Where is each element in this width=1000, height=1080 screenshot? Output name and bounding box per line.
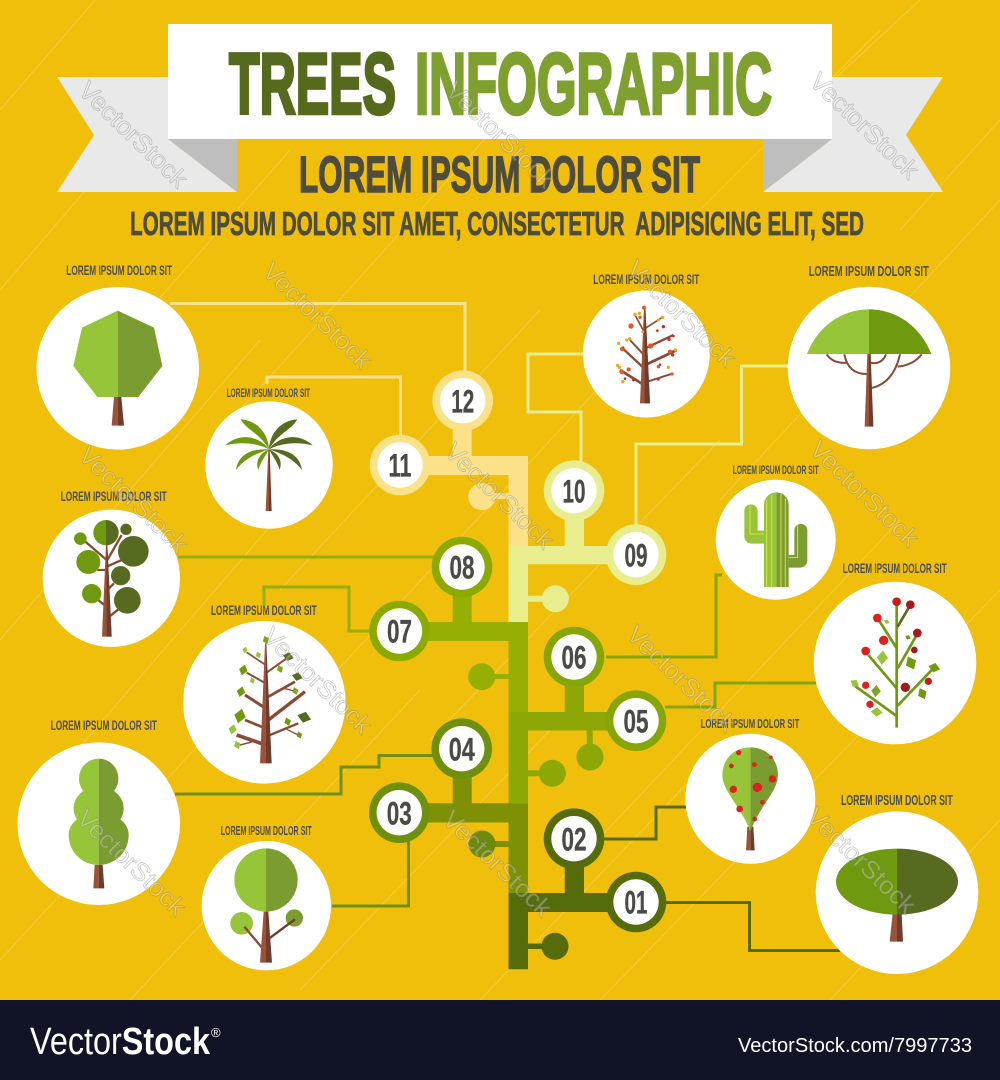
label: palm: LOREM IPSUM DOLOR SIT (227, 388, 310, 400)
trunk section: 03-04 (400, 749, 528, 893)
panel: berry tree (814, 582, 976, 744)
watermarks: VectorStock (621, 620, 741, 738)
title banner (57, 24, 943, 192)
panel: leafy tree (183, 621, 346, 784)
watermarks: VectorStock (804, 435, 924, 553)
label: autumn tree: LOREM IPSUM DOLOR SIT (593, 271, 700, 287)
node 08 (432, 537, 492, 597)
node 11: 11 (388, 448, 412, 484)
trunk section: 09-10 (508, 490, 636, 622)
trunk section: 11-12 (400, 400, 528, 546)
title second word: INFOGRAPHIC (415, 36, 772, 132)
watermarks: VectorStock (439, 437, 559, 555)
ribbon tail: left (57, 77, 237, 192)
node 03 (369, 782, 430, 843)
node 08: 08 (450, 550, 474, 586)
node 01: 01 (624, 885, 648, 921)
watermarks: VectorStock (73, 76, 193, 194)
icon: palm tree (225, 419, 313, 511)
node 06 (544, 627, 604, 687)
node 10 (544, 460, 604, 521)
label: tree 12: LOREM IPSUM DOLOR SIT (66, 262, 172, 278)
node 05 (606, 690, 666, 751)
connector lines (170, 304, 840, 950)
icon: tall tree (69, 759, 129, 888)
icon: pear tree (722, 747, 778, 850)
panel: oval tree (816, 811, 978, 974)
panel: umbrella tree (788, 287, 950, 449)
node 09: 09 (624, 537, 648, 573)
watermarks: VectorStock (440, 76, 560, 194)
watermarks: VectorStock (437, 805, 557, 923)
subtitle: LOREM IPSUM DOLOR SIT (299, 146, 700, 203)
panel: circles tree (43, 510, 180, 647)
watermarks: VectorStock (71, 804, 191, 922)
node 01 (606, 872, 666, 932)
icon: heptagon tree (73, 311, 162, 426)
footer bar: ® (211, 1025, 221, 1040)
icon: autumn tree (616, 306, 677, 403)
node 02 (544, 808, 604, 869)
watermarks: VectorStock (804, 67, 924, 185)
panel: cactus (716, 480, 836, 600)
icon: oval tree (836, 849, 958, 942)
panel: tall tree (17, 742, 180, 905)
watermarks: VectorStock (73, 441, 193, 559)
label: cactus: LOREM IPSUM DOLOR SIT (733, 463, 819, 477)
icon: round tree (230, 848, 303, 963)
node 11 (370, 435, 430, 495)
node 03: 03 (387, 795, 412, 831)
node 04 (431, 718, 492, 779)
panel: heptagon tree (36, 287, 199, 450)
icon: berry tree (850, 597, 941, 728)
icon: circles tree (74, 520, 149, 637)
trunk section: 07-08 (400, 567, 528, 712)
title: TREES (229, 36, 396, 132)
node 04: 04 (449, 731, 475, 767)
trunk section: 01-02 (508, 839, 636, 969)
panel: pear tree (685, 734, 815, 864)
watermarks: VectorStock (257, 622, 377, 740)
label: leafy tree: LOREM IPSUM DOLOR SIT (211, 602, 317, 618)
label: circles tree: LOREM IPSUM DOLOR SIT (61, 488, 167, 504)
node 09 (606, 524, 666, 585)
watermarks: VectorStock (257, 257, 377, 375)
icon: umbrella tree (807, 309, 931, 427)
panel: autumn tree (583, 290, 710, 418)
node 10: 10 (562, 473, 586, 509)
panel: palm tree (205, 401, 333, 529)
watermarks: VectorStock (621, 255, 741, 373)
node 05: 05 (624, 703, 648, 739)
node 07: 07 (387, 614, 412, 650)
watermarks: VectorStock (801, 802, 921, 920)
footer bar (0, 1000, 1000, 1080)
label: pear tree: LOREM IPSUM DOLOR SIT (701, 716, 799, 731)
panel: round tree (202, 841, 331, 970)
footer logo: VectorStock (30, 1021, 211, 1063)
node 06: 06 (562, 640, 586, 676)
node 02: 02 (562, 821, 586, 857)
trunk section: 05-06 (508, 657, 636, 803)
ribbon tail: right (763, 77, 943, 192)
node 12 (432, 370, 493, 431)
node 07 (369, 601, 430, 661)
node 12: 12 (451, 383, 474, 419)
icon: cactus (744, 492, 807, 587)
central tree diagram (400, 400, 636, 969)
footer image id: VectorStock.com/7997733 (738, 1035, 972, 1057)
label: round tree: LOREM IPSUM DOLOR SIT (221, 824, 312, 838)
icon: leafy tree (228, 635, 311, 763)
watermarks (71, 67, 924, 923)
label: tall tree: LOREM IPSUM DOLOR SIT (51, 717, 157, 733)
label: umbrella tree: LOREM IPSUM DOLOR SIT (809, 263, 929, 280)
